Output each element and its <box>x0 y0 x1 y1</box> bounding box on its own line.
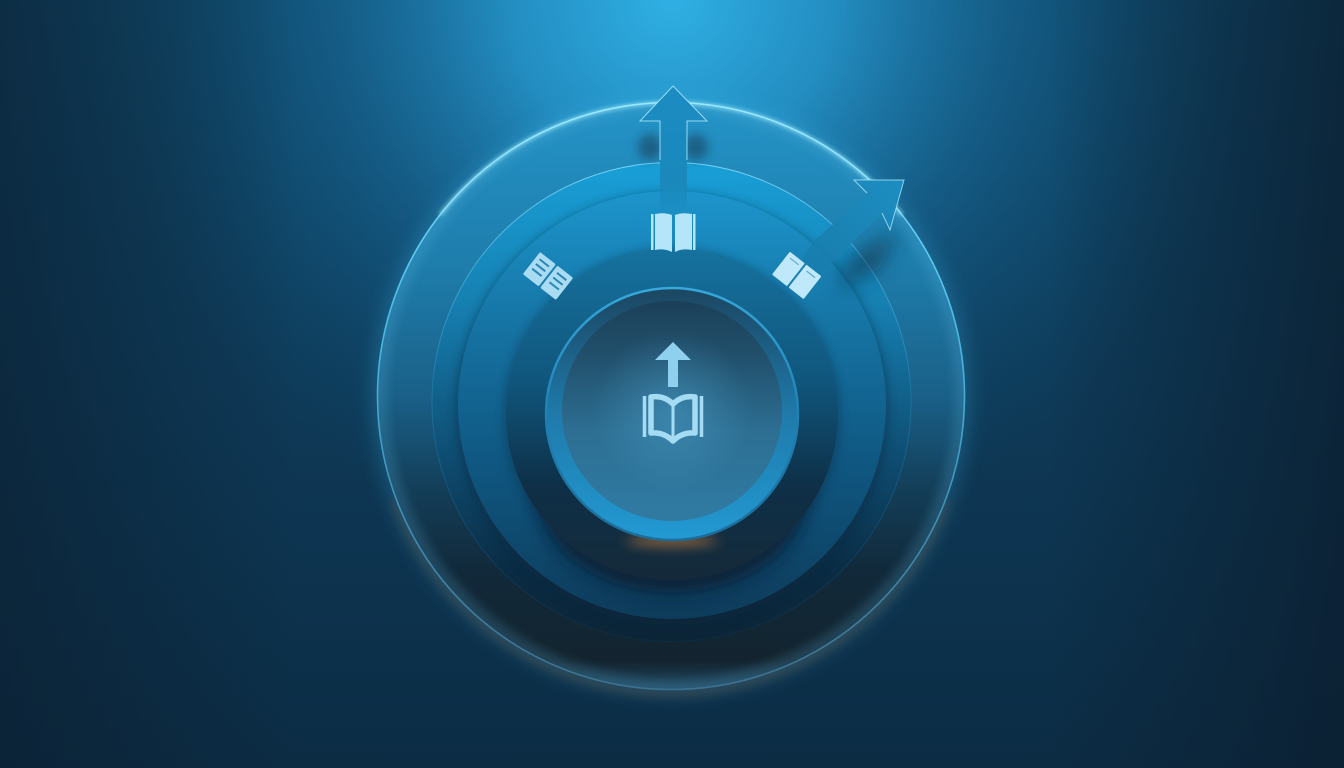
warm glow under inner disc <box>626 536 718 546</box>
ring 1: outer translucent disc <box>377 102 965 690</box>
up arrow <box>638 86 708 215</box>
icon: centre arrow <box>655 342 691 387</box>
inner disc face <box>562 301 782 521</box>
concentric dial <box>377 102 965 690</box>
ring 4 shadow <box>501 244 843 528</box>
arrow shadow <box>840 228 900 290</box>
ring 4 <box>506 248 838 580</box>
ring 3 <box>458 191 886 619</box>
inner disc rim <box>545 287 799 541</box>
icon: book left <box>523 252 573 300</box>
ring 3 shadow <box>452 188 892 545</box>
diagonal arrow <box>800 180 904 290</box>
icon: book top <box>651 213 696 252</box>
icon: centre book <box>644 396 702 441</box>
arrow shadow <box>638 134 708 160</box>
ring 2 <box>432 162 912 642</box>
icon: book right <box>772 252 821 299</box>
outer glow and warm halo <box>373 98 969 694</box>
